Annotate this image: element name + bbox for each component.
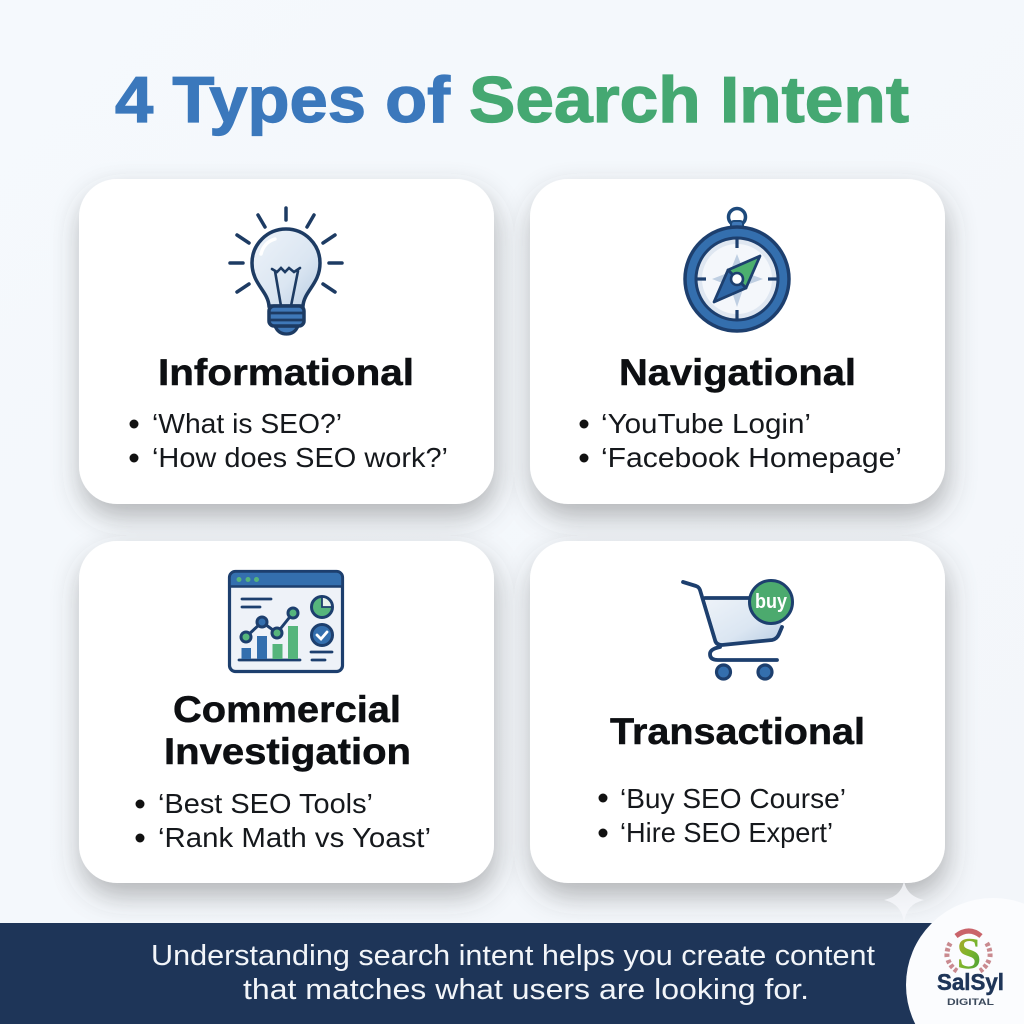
bullet list: transactional <box>598 783 846 848</box>
logo: SalSyl Digital: SalSyl <box>937 969 1004 995</box>
heading: commercial investigation: Commercial <box>173 689 401 730</box>
heading: transactional: Transactional <box>610 711 865 752</box>
bullet list: transactional: ‘Buy SEO Course’ <box>620 783 846 814</box>
icon: light bulb <box>230 208 342 334</box>
bullet list: navigational: ‘YouTube Login’ <box>601 408 811 439</box>
footer text <box>151 940 875 1006</box>
bullet list: informational: ‘What is SEO?’ <box>152 408 342 439</box>
heading: commercial investigation <box>164 689 411 772</box>
panel: navigational <box>530 179 945 504</box>
title: 4 Types of <box>115 63 450 136</box>
panel: commercial investigation <box>79 541 494 883</box>
logo: SalSyl Digital: S <box>957 929 981 978</box>
logo: SalSyl Digital <box>906 898 1024 1024</box>
footer text: that matches what users are looking for. <box>243 974 809 1006</box>
bullet list: commercial investigation: ‘Rank Math vs Yoast’ <box>158 822 431 853</box>
bullet list: navigational <box>580 408 902 473</box>
bullet list: navigational: ‘Facebook Homepage’ <box>601 442 902 473</box>
bullet list: commercial investigation <box>136 788 431 853</box>
panel: informational <box>79 179 494 504</box>
heading: informational: Informational <box>158 352 414 393</box>
footer text: Understanding search intent helps you create content <box>151 940 875 972</box>
icon: compass <box>685 208 789 331</box>
panel: transactional <box>530 541 945 883</box>
icon: shopping cart <box>683 580 792 679</box>
heading: commercial investigation: Investigation <box>164 731 411 772</box>
bullet list: transactional: ‘Hire SEO Expert’ <box>620 817 833 848</box>
logo: SalSyl Digital: DIGITAL <box>947 997 994 1008</box>
bullet list: informational <box>130 408 448 473</box>
icon: shopping cart: buy <box>755 591 788 613</box>
title <box>115 63 909 136</box>
icon: analytics dashboard <box>230 572 342 672</box>
heading: navigational: Navigational <box>619 352 856 393</box>
bullet list: commercial investigation: ‘Best SEO Tools’ <box>158 788 373 819</box>
title: Search Intent <box>469 63 909 136</box>
footer banner <box>0 898 1024 1024</box>
bullet list: informational: ‘How does SEO work?’ <box>152 442 448 473</box>
